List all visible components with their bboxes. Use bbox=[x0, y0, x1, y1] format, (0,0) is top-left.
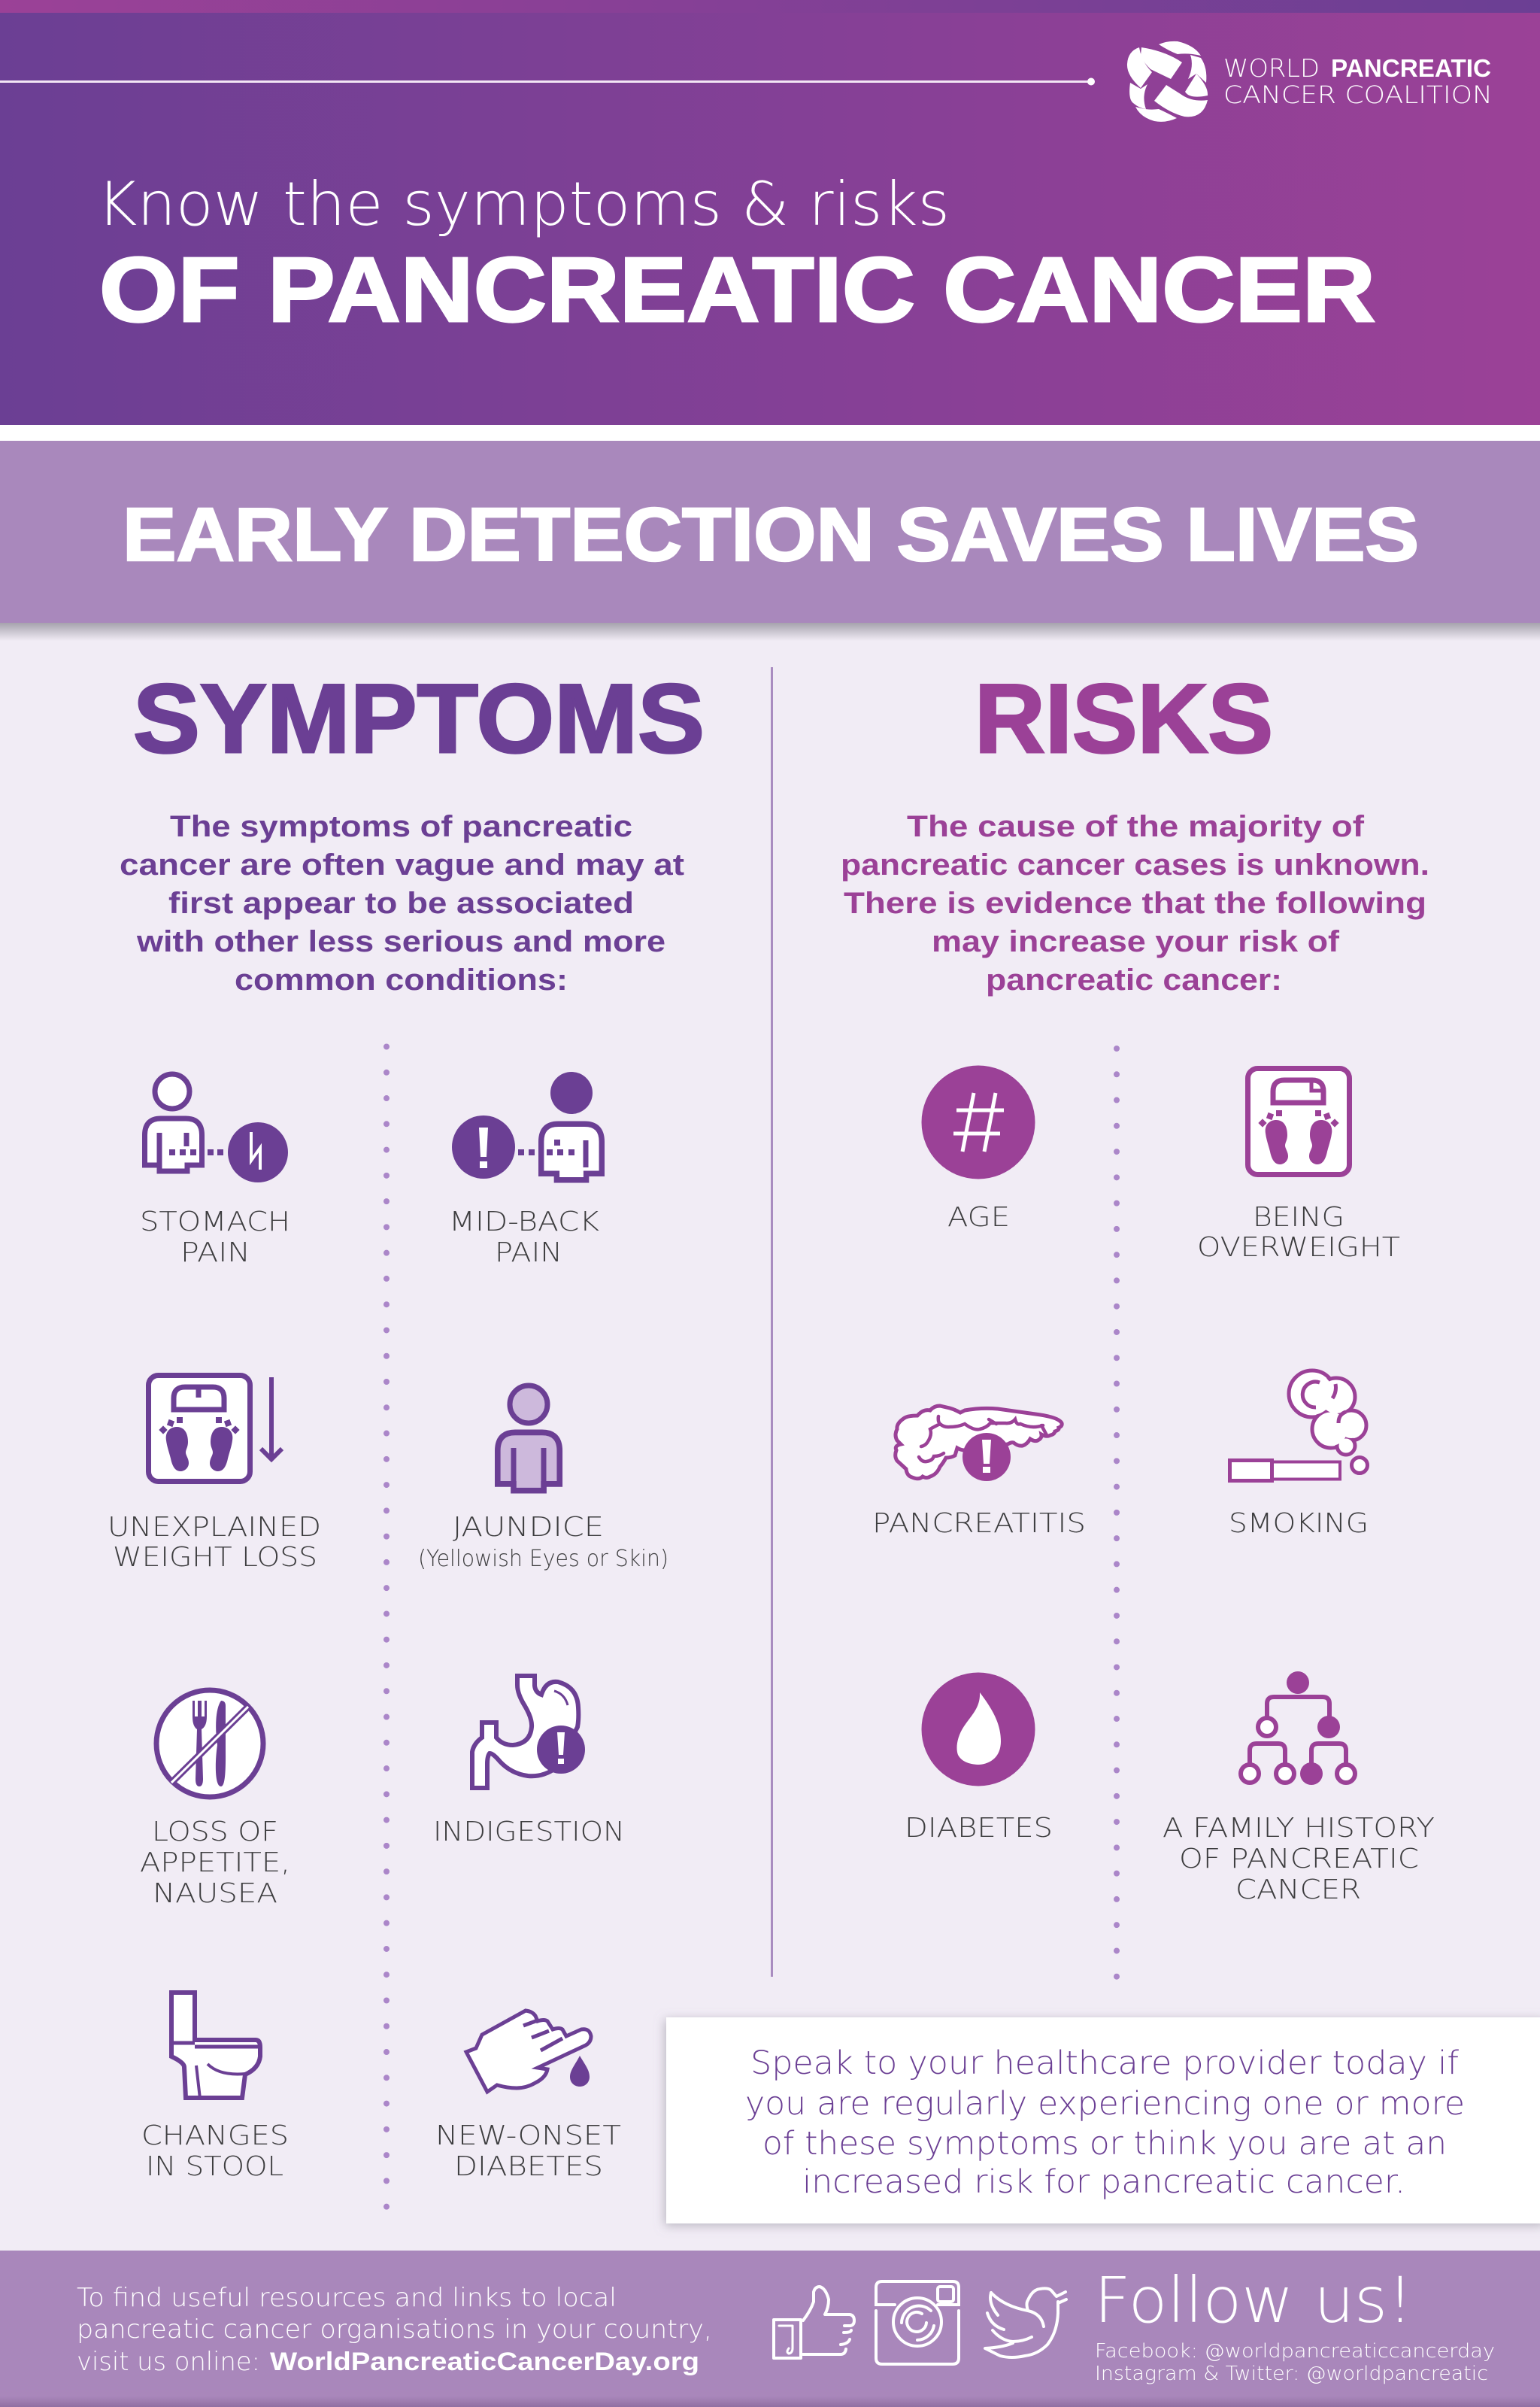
label: jaundice: JAUNDICE bbox=[453, 1512, 604, 1543]
label: family history: A FAMILY HISTORY bbox=[1163, 1813, 1435, 1844]
social media handles: Instagram & Twitter: @worldpancreatic bbox=[1095, 2363, 1488, 2385]
label: loss of appetite, nausea: LOSS OF bbox=[152, 1817, 278, 1847]
risk: smoking bbox=[1229, 1370, 1369, 1539]
icon: twitter bird bbox=[985, 2288, 1066, 2357]
symptoms intro text: first appear to be associated bbox=[168, 887, 634, 920]
logo wordmark bbox=[1223, 53, 1493, 109]
white band bbox=[0, 425, 1540, 441]
label: age: AGE bbox=[947, 1202, 1010, 1233]
icon: crossed-out cutlery bbox=[156, 1690, 263, 1797]
icon: instagram camera bbox=[876, 2281, 959, 2364]
symptoms intro text: with other less serious and more bbox=[136, 925, 665, 958]
social media handles bbox=[1095, 2340, 1495, 2385]
footer resources text: pancreatic cancer organisations in your country, bbox=[77, 2314, 712, 2345]
banner: early detection bbox=[0, 441, 1540, 641]
footer panel bbox=[0, 2251, 1540, 2407]
symptom: unexplained weight loss bbox=[108, 1375, 321, 1573]
icon: blood drop in circle bbox=[922, 1673, 1035, 1786]
label: being overweight: OVERWEIGHT bbox=[1197, 1232, 1400, 1263]
label: indigestion: INDIGESTION bbox=[433, 1817, 625, 1847]
label: being overweight bbox=[1197, 1202, 1400, 1263]
icon: mid-back pain bbox=[452, 1072, 602, 1180]
label: unexplained weight loss: UNEXPLAINED bbox=[108, 1512, 321, 1543]
label: mid-back pain: MID-BACK bbox=[449, 1207, 599, 1237]
label: smoking: SMOKING bbox=[1229, 1508, 1369, 1539]
subtitle: Know the symptoms & risks bbox=[97, 169, 950, 239]
symptoms intro text: The symptoms of pancreatic bbox=[170, 810, 632, 843]
label: stomach pain bbox=[140, 1207, 290, 1268]
label: changes in stool: CHANGES bbox=[141, 2120, 289, 2151]
risks intro text: pancreatic cancer cases is unknown. bbox=[841, 848, 1429, 882]
icon: stomach pain bbox=[144, 1074, 288, 1182]
risks intro text bbox=[841, 810, 1429, 997]
symptoms intro text: common conditions: bbox=[235, 964, 568, 997]
risks intro text: pancreatic cancer: bbox=[986, 964, 1282, 997]
logo wordmark: CANCER COALITION bbox=[1223, 80, 1493, 109]
risk: pancreatitis bbox=[872, 1406, 1086, 1539]
label: new-onset diabetes: NEW-ONSET bbox=[435, 2120, 621, 2151]
symptom: new-onset diabetes bbox=[435, 2011, 621, 2182]
label: stomach pain: STOMACH bbox=[140, 1207, 290, 1237]
symptom: loss of appetite, nausea bbox=[140, 1690, 290, 1909]
symptom: indigestion bbox=[433, 1676, 625, 1847]
label: new-onset diabetes: DIABETES bbox=[454, 2151, 603, 2182]
callout: speak to your healthcare provider: you are regularly experiencing one or more bbox=[745, 2085, 1465, 2123]
banner heading: EARLY DETECTION SAVES LIVES bbox=[123, 493, 1419, 577]
label: mid-back pain bbox=[449, 1207, 599, 1268]
symptoms intro text bbox=[120, 810, 684, 997]
symptom: stomach pain bbox=[140, 1074, 290, 1268]
heading: risks: RISKS bbox=[975, 663, 1273, 773]
label: changes in stool bbox=[141, 2120, 289, 2182]
centre divider bbox=[771, 667, 773, 1977]
footer resources text bbox=[77, 2283, 712, 2377]
label: unexplained weight loss bbox=[108, 1512, 321, 1573]
label: family history: OF PANCREATIC bbox=[1179, 1844, 1419, 1874]
footer resources text: visit us online: bbox=[77, 2347, 260, 2377]
callout: speak to your healthcare provider bbox=[666, 2017, 1540, 2223]
logo wordmark: WORLD bbox=[1223, 53, 1320, 83]
risk: being overweight bbox=[1197, 1068, 1400, 1263]
heading: symptoms: SYMPTOMS bbox=[133, 663, 705, 773]
header panel bbox=[0, 0, 1540, 425]
main title: OF PANCREATIC CANCER bbox=[99, 238, 1375, 341]
risks intro text: may increase your risk of bbox=[932, 925, 1340, 958]
symptom: jaundice bbox=[418, 1386, 668, 1572]
icon: family tree bbox=[1241, 1671, 1355, 1785]
risks intro text: There is evidence that the following bbox=[844, 887, 1426, 920]
icon: stomach with alert bbox=[472, 1676, 585, 1788]
logo wordmark: PANCREATIC bbox=[1331, 54, 1491, 82]
icon: bathroom scale bbox=[1248, 1068, 1349, 1175]
label: diabetes: DIABETES bbox=[905, 1813, 1053, 1844]
label: loss of appetite, nausea: NAUSEA bbox=[153, 1878, 277, 1909]
label: loss of appetite, nausea bbox=[140, 1817, 290, 1909]
label: stomach pain: PAIN bbox=[180, 1237, 250, 1268]
risks intro text: The cause of the majority of bbox=[907, 810, 1365, 843]
icon: pancreas with alert bbox=[896, 1406, 1062, 1481]
label: unexplained weight loss: WEIGHT LOSS bbox=[113, 1542, 317, 1573]
icon: scale with down arrow bbox=[149, 1375, 282, 1482]
symptom: changes in stool bbox=[141, 1993, 289, 2182]
label: being overweight: BEING bbox=[1253, 1202, 1344, 1233]
logo mark bbox=[1127, 41, 1208, 122]
label: family history: CANCER bbox=[1235, 1874, 1361, 1905]
label: jaundice bbox=[418, 1512, 668, 1572]
footer resources text: WorldPancreaticCancerDay.org bbox=[270, 2348, 699, 2376]
callout: speak to your healthcare provider: of these symptoms or think you are at an bbox=[762, 2125, 1447, 2163]
label: jaundice: (Yellowish Eyes or Skin) bbox=[418, 1546, 668, 1572]
label: pancreatitis: PANCREATITIS bbox=[872, 1508, 1086, 1539]
logo: World Pancreatic Cancer Coalition bbox=[1127, 41, 1493, 122]
label: new-onset diabetes bbox=[435, 2120, 621, 2182]
social media handles: Facebook: @worldpancreaticcancerday bbox=[1095, 2340, 1495, 2363]
risk: age bbox=[922, 1065, 1035, 1233]
footer resources text: To find useful resources and links to local bbox=[77, 2283, 617, 2313]
icon: facebook thumbs up bbox=[774, 2287, 854, 2358]
dotted divider: risks bbox=[1114, 1049, 1120, 1977]
dotted divider: symptoms bbox=[383, 1047, 390, 2207]
icon: jaundice person bbox=[498, 1386, 559, 1491]
follow us heading: Follow us! bbox=[1094, 2263, 1413, 2337]
risk: diabetes bbox=[905, 1673, 1053, 1844]
label: changes in stool: IN STOOL bbox=[146, 2151, 283, 2182]
callout: speak to your healthcare provider: Speak to your healthcare provider today if bbox=[750, 2044, 1459, 2082]
icon: pricked finger with blood drop bbox=[466, 2011, 591, 2092]
symptom: mid-back pain bbox=[449, 1072, 602, 1268]
label: family history bbox=[1163, 1813, 1435, 1905]
icon: toilet bbox=[171, 1993, 260, 2099]
callout: speak to your healthcare provider: increased risk for pancreatic cancer. bbox=[802, 2163, 1405, 2201]
symptoms intro text: cancer are often vague and may at bbox=[120, 848, 684, 882]
icon: hash in circle bbox=[922, 1065, 1035, 1179]
risk: family history bbox=[1163, 1671, 1435, 1905]
label: loss of appetite, nausea: APPETITE, bbox=[140, 1847, 290, 1878]
label: mid-back pain: PAIN bbox=[495, 1237, 562, 1268]
icon: cigarette and smoke bbox=[1230, 1370, 1367, 1480]
